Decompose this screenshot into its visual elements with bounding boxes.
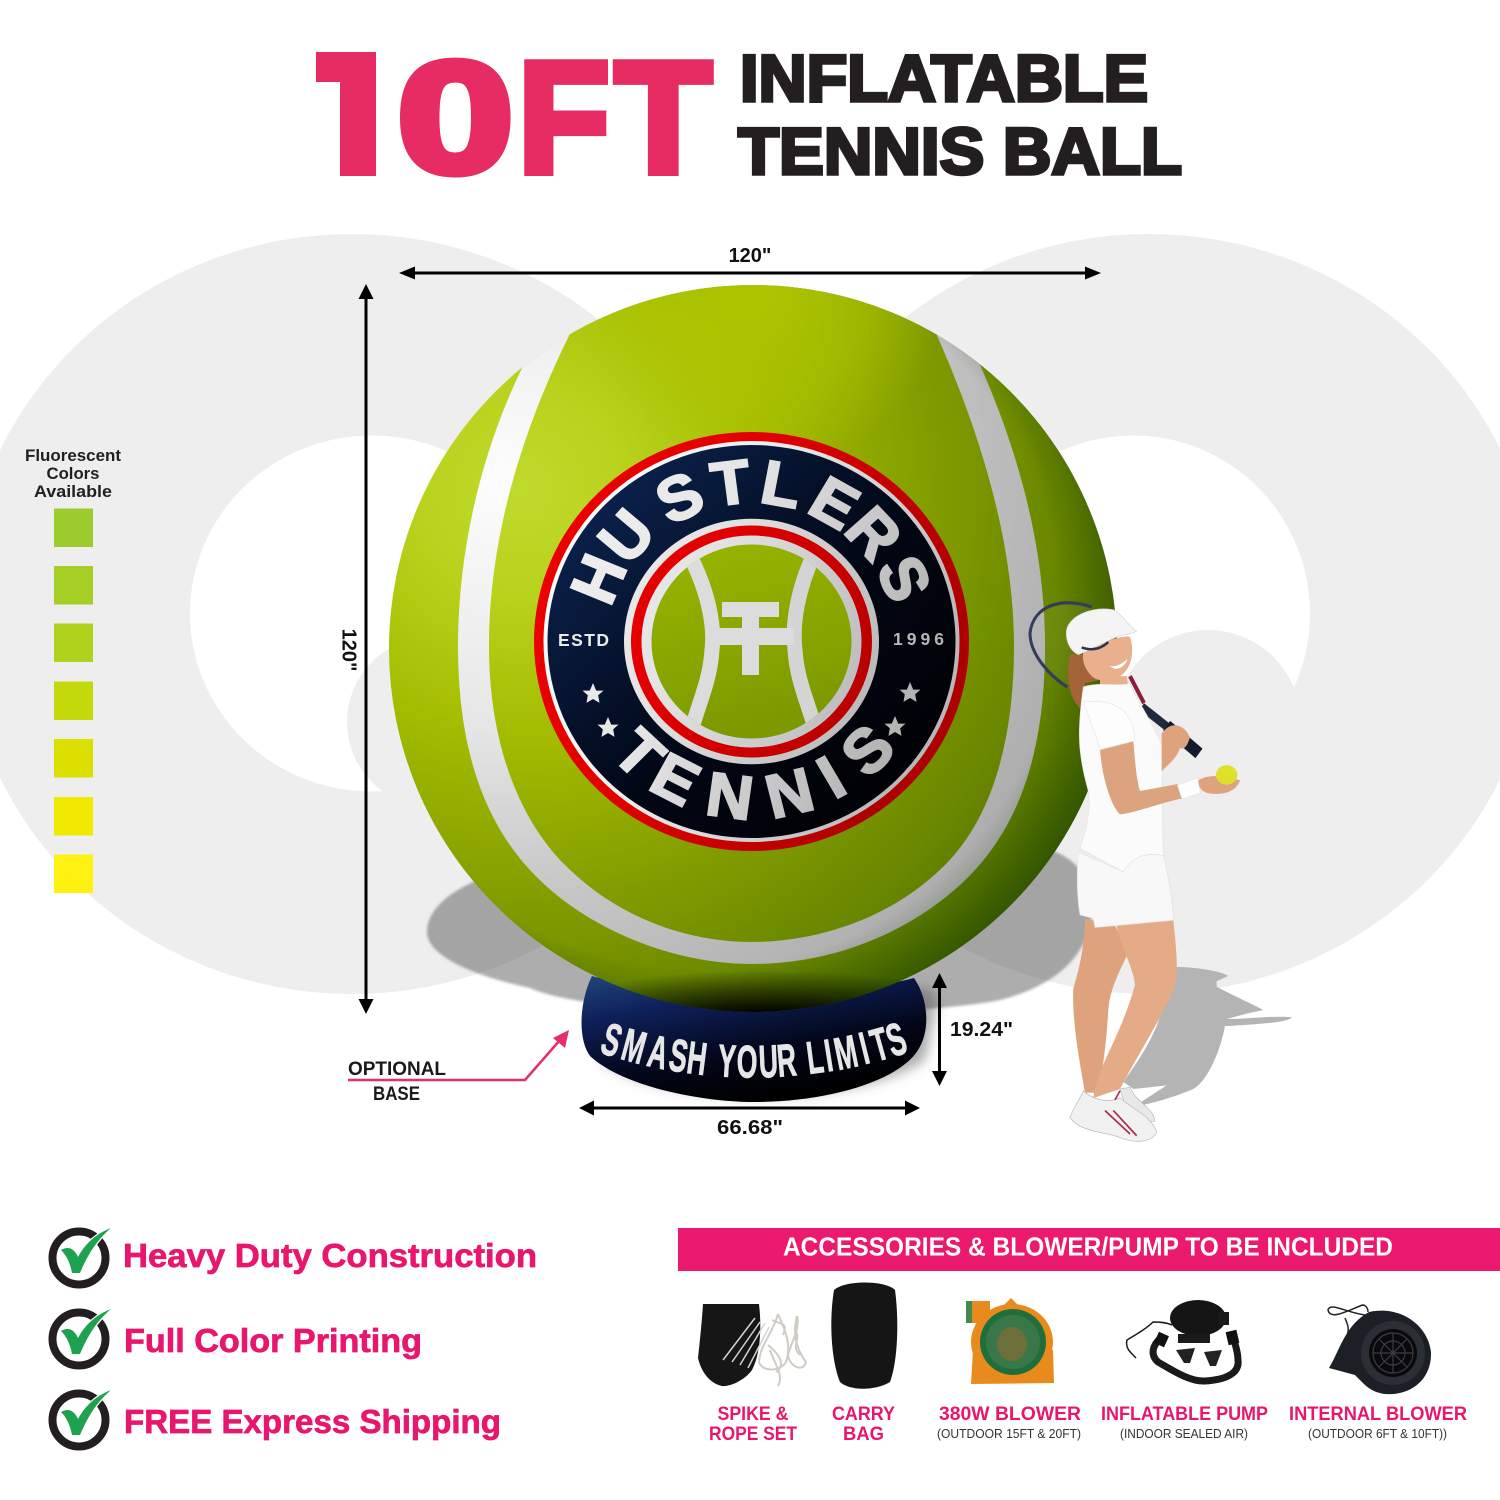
base slogan <box>596 1012 912 1087</box>
title: inflatable tennis ball <box>738 41 1182 188</box>
base slogan: S <box>880 1012 912 1067</box>
background decorative gray rings <box>0 234 1500 994</box>
base slogan: S <box>596 1013 628 1067</box>
label <box>709 1404 797 1445</box>
icon: check mark <box>52 1390 111 1446</box>
dimension: ball width <box>399 245 1101 280</box>
sublabel: (OUTDOOR 15FT & 20FT) <box>937 1426 1081 1441</box>
cap <box>1066 609 1137 655</box>
arm <box>1100 740 1183 814</box>
dimension: base height: 19.24" <box>950 1019 1013 1041</box>
base slogan: R <box>775 1034 798 1087</box>
shoes <box>1070 1087 1157 1141</box>
logo: ESTD 1996: 1996 <box>893 629 944 649</box>
sleeve <box>1083 701 1135 750</box>
hair <box>1068 655 1100 708</box>
logo text: HUSTLERS: T <box>707 447 755 520</box>
label: INTERNAL BLOWER <box>1289 1404 1467 1425</box>
icon: orange blower <box>966 1298 1054 1384</box>
dimension: base width: 66.68" <box>717 1117 783 1139</box>
label: ROPE SET <box>709 1424 797 1445</box>
base slogan: O <box>737 1036 758 1087</box>
base slogan: L <box>804 1031 826 1084</box>
base slogan: T <box>865 1017 895 1071</box>
logo text: HUSTLERS: U <box>585 497 669 576</box>
accessory: spike and rope set <box>698 1304 806 1445</box>
hand holding ball <box>1198 776 1240 794</box>
logo text: TENNIS: S <box>828 712 909 789</box>
logo: inner tennis ball monogram <box>688 552 815 728</box>
label: SPIKE & <box>718 1404 789 1425</box>
legend heading <box>25 447 122 501</box>
shorts <box>1077 852 1173 927</box>
feature: free express shipping: FREE Express Shipping <box>124 1403 501 1440</box>
title: inflatable tennis ball: INFLATABLE <box>740 41 1148 115</box>
accessory: carry bag <box>831 1282 897 1445</box>
ground shadow of ball <box>427 840 1092 1014</box>
accessories banner <box>678 1228 1500 1271</box>
logo text: HUSTLERS <box>557 447 945 613</box>
feature: heavy duty construction <box>52 1228 537 1284</box>
icon: check mark <box>52 1309 111 1366</box>
logo text: TENNIS <box>600 712 909 834</box>
neck and face <box>1083 636 1132 696</box>
logo text: HUSTLERS: E <box>798 464 871 544</box>
hand on racket <box>1162 725 1190 771</box>
base slogan: A <box>644 1025 673 1079</box>
label: CARRY <box>832 1404 895 1425</box>
small tennis ball <box>1216 765 1237 785</box>
callout: optional base: BASE <box>373 1084 420 1105</box>
legend: fluorescent colors <box>25 447 122 893</box>
title: 10FT: F <box>518 28 610 206</box>
logo: ESTD 1996: ESTD <box>558 630 609 650</box>
ball logo: Hustlers Tennis <box>534 432 969 851</box>
base slogan: I <box>821 1029 836 1081</box>
dimension: ball height <box>338 284 374 1014</box>
label: BAG <box>843 1424 884 1445</box>
base slogan: M <box>830 1025 862 1080</box>
icon: black blower <box>1328 1305 1431 1394</box>
optional base <box>582 976 938 1102</box>
accessory: 380W blower <box>937 1298 1081 1441</box>
label: 380W BLOWER <box>939 1404 1081 1425</box>
logo text: TENNIS: E <box>640 740 711 820</box>
legs <box>1073 918 1177 1098</box>
legend heading: Available <box>34 483 112 501</box>
base slogan: H <box>684 1032 710 1085</box>
feature: free express shipping <box>52 1390 501 1446</box>
logo text: HUSTLERS: S <box>645 458 714 538</box>
dimension: ball width: 120" <box>729 245 771 267</box>
accessory: inflatable pump <box>1101 1300 1268 1441</box>
title: 10FT: 1 <box>306 29 401 206</box>
callout: optional base: OPTIONAL <box>348 1059 446 1080</box>
logo text: HUSTLERS: H <box>557 545 641 613</box>
shirt <box>1079 683 1163 872</box>
logo text: TENNIS: N <box>702 760 757 834</box>
racket <box>1030 603 1199 753</box>
legend heading: Fluorescent <box>25 447 122 465</box>
icon: bag, spikes, ropes <box>698 1304 806 1386</box>
title: inflatable tennis ball: TENNIS BALL <box>738 114 1182 188</box>
sublabel: (OUTDOOR 6FT & 10FT)) <box>1308 1426 1447 1441</box>
ball seam band <box>458 280 1045 964</box>
accessory: internal blower <box>1289 1305 1467 1441</box>
logo: ESTD 1996 <box>558 629 944 650</box>
label: INFLATABLE PUMP <box>1101 1404 1268 1425</box>
title: 10FT <box>316 52 714 178</box>
feature: heavy duty construction: Heavy Duty Construction <box>123 1237 537 1274</box>
base slogan: Y <box>717 1035 737 1087</box>
base slogan: U <box>758 1035 779 1087</box>
dimension: base width <box>579 1100 920 1139</box>
accessories banner: ACCESSORIES & BLOWER/PUMP TO BE INCLUDED <box>783 1232 1393 1262</box>
base slogan: I <box>854 1022 874 1074</box>
dimension: base height <box>932 973 1013 1086</box>
icon: check mark <box>52 1228 111 1284</box>
callout: optional base <box>348 1030 569 1105</box>
title <box>316 52 1182 178</box>
sublabel: (INDOOR SEALED AIR) <box>1120 1426 1248 1441</box>
arrow: to base <box>348 1030 569 1080</box>
icon: carry bag <box>831 1282 897 1389</box>
icon: pump and hose <box>1127 1300 1238 1381</box>
logo text: HUSTLERS: S <box>862 546 945 611</box>
base slogan: S <box>666 1029 692 1082</box>
feature list <box>52 1228 537 1446</box>
feature: full color printing <box>52 1309 422 1366</box>
legend heading: Colors <box>46 465 100 483</box>
feature: full color printing: Full Color Printing <box>124 1322 422 1359</box>
logo: stars <box>582 682 920 737</box>
logo text: TENNIS: I <box>806 744 857 812</box>
logo text: HUSTLERS: L <box>756 448 807 522</box>
label <box>832 1404 895 1445</box>
logo text: TENNIS: T <box>600 716 677 792</box>
base slogan: M <box>617 1018 652 1074</box>
logo text: HUSTLERS: R <box>832 494 915 574</box>
woman tennis player <box>1030 603 1240 1141</box>
dimension: ball height: 120" <box>338 629 360 671</box>
title: 10FT: T <box>615 30 712 206</box>
woman's cast shadow <box>1123 967 1292 1107</box>
logo text: TENNIS: N <box>759 755 821 832</box>
wristband <box>1177 777 1200 799</box>
tennis ball <box>380 270 1125 1020</box>
color swatches <box>54 508 93 893</box>
title: 10FT: 0 <box>397 30 514 206</box>
